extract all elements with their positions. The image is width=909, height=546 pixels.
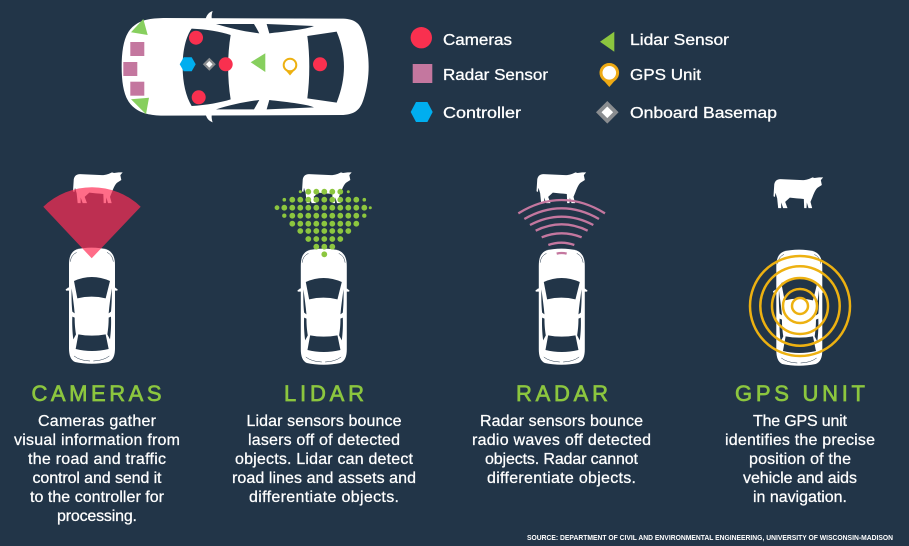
legend: radar sensor: Radar Sensor <box>443 67 549 84</box>
icon: cow <box>73 172 123 203</box>
legend: lidar sensor: Lidar Sensor <box>630 32 730 49</box>
description: objects. Lidar can detect <box>235 451 414 468</box>
legend: gps unit: GPS Unit <box>630 67 702 84</box>
description: Radar sensors bounce <box>480 413 643 430</box>
description <box>232 413 416 506</box>
camera field of view <box>43 187 141 258</box>
description: The GPS unit <box>753 413 848 430</box>
icon: car <box>66 248 118 364</box>
panel: gps unit <box>725 177 875 506</box>
description <box>725 413 875 506</box>
description: in navigation. <box>753 489 847 506</box>
description: objects. Radar cannot <box>485 451 639 468</box>
heading: LIDAR <box>284 381 364 406</box>
legend: controller: Controller <box>443 105 522 122</box>
panel: radar <box>472 172 651 487</box>
description: vehicle and aids <box>743 470 857 487</box>
description: visual information from <box>14 432 180 449</box>
lidar sensors <box>131 19 265 114</box>
description: control and send it <box>32 470 162 487</box>
description: to the controller for <box>30 489 165 506</box>
gps signal rings <box>750 256 850 356</box>
lidar dot field <box>275 190 372 254</box>
description: Cameras gather <box>38 413 157 430</box>
description: radio waves off detected <box>472 432 651 449</box>
car top view <box>122 11 369 122</box>
legend: onboard basemap: Onboard Basemap <box>630 105 777 122</box>
panel: cameras <box>14 172 180 525</box>
icon: cow <box>536 172 586 203</box>
gps unit <box>284 59 296 76</box>
heading: CAMERAS <box>32 381 162 406</box>
description: identifies the precise <box>725 432 875 449</box>
legend: cameras: Cameras <box>443 32 512 49</box>
legend: gps unit <box>601 64 702 87</box>
cameras <box>189 31 327 104</box>
icon: car <box>773 250 825 366</box>
legend: cameras <box>411 27 512 49</box>
radar sensors <box>123 42 144 96</box>
legend: radar sensor <box>413 64 549 84</box>
onboard basemap <box>203 58 216 71</box>
icon: cow <box>774 177 823 208</box>
description: lasers off of detected <box>248 432 400 449</box>
diagram: car with sensor placement <box>122 11 369 122</box>
description <box>472 413 651 487</box>
description: Lidar sensors bounce <box>246 413 402 430</box>
legend <box>411 27 777 124</box>
heading: GPS UNIT <box>735 381 865 406</box>
description <box>14 413 180 525</box>
controller <box>180 57 196 71</box>
description: differentiate objects. <box>249 489 399 506</box>
description: position of the <box>749 451 851 468</box>
legend: lidar sensor <box>600 32 730 52</box>
icon: car <box>535 249 587 365</box>
description: processing. <box>57 508 137 525</box>
description: the road and traffic <box>28 451 166 468</box>
icon: car <box>297 249 349 365</box>
legend: controller <box>411 102 522 122</box>
legend: onboard basemap <box>596 101 777 124</box>
panel: lidar <box>232 172 416 506</box>
icon: cow <box>302 172 352 203</box>
description: differentiate objects. <box>487 470 636 487</box>
heading: RADAR <box>516 381 608 406</box>
source note: SOURCE: DEPARTMENT OF CIVIL AND ENVIRONMENTAL ENGINEERING, UNIVERSITY OF WISCONSIN-MADISON <box>527 535 893 542</box>
description: road lines and assets and <box>232 470 416 487</box>
radar waves <box>518 200 605 254</box>
